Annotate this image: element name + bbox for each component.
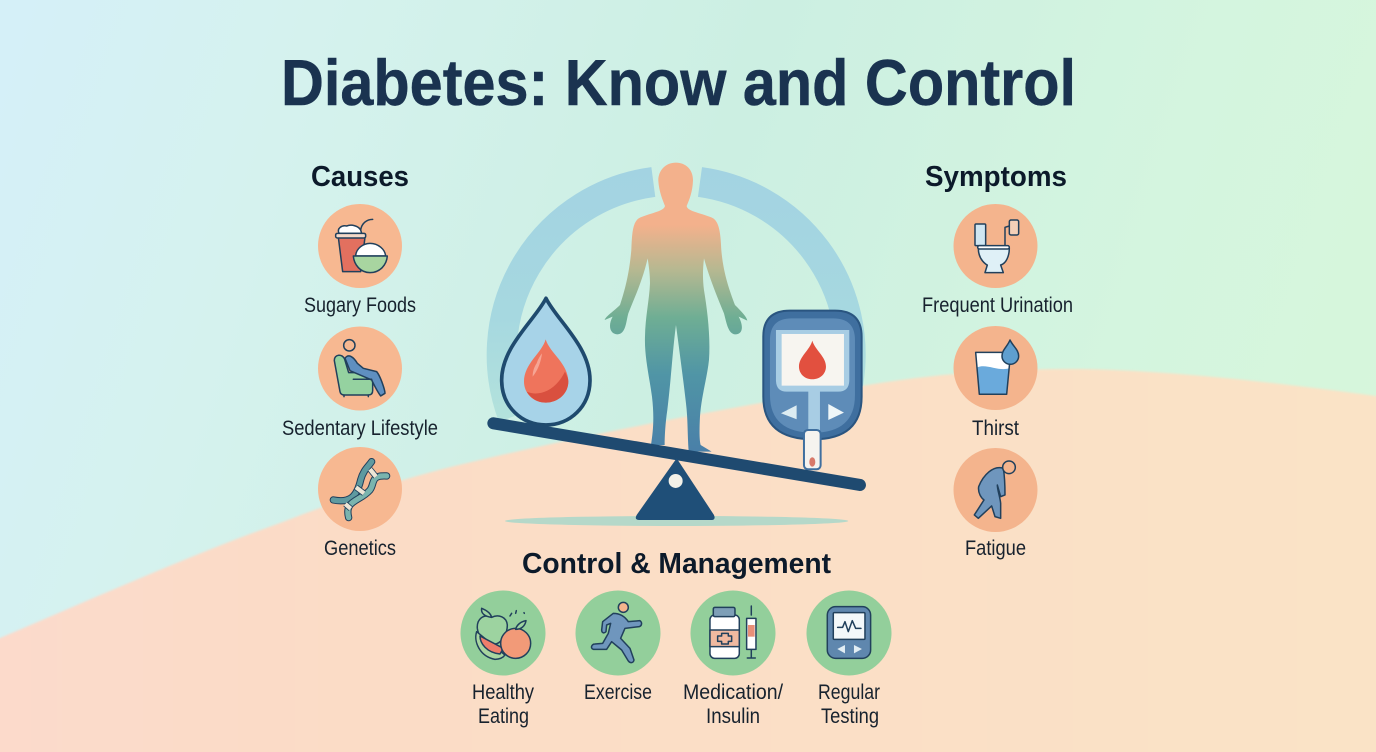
icon: medication and insulin [690,590,776,676]
label: genetics: Genetics [324,537,396,560]
icon: sugary foods [318,204,402,288]
seesaw fulcrum [636,458,715,520]
label: medication insulin: Insulin [706,705,760,728]
seesaw beam [493,423,860,485]
panel: central balance illustration [493,163,862,526]
icon: glass of water [954,326,1038,410]
label: medication insulin: Medication/ [683,681,783,704]
label: regular testing: Testing [821,705,879,728]
label: thirst: Thirst [972,417,1019,440]
label: frequent urination: Frequent Urination [922,294,1073,317]
heading: causes: Causes [311,161,409,193]
label: medication insulin [683,681,783,728]
panel: symptoms [922,161,1073,560]
ground shadow [505,516,848,526]
heading: symptoms: Symptoms [925,161,1067,193]
icon: tired person [954,448,1038,532]
label: exercise: Exercise [584,681,652,704]
icon: exercise runner [576,590,660,676]
label: healthy eating [472,681,534,728]
label: regular testing [818,681,880,728]
label: healthy eating: Eating [478,705,529,728]
label: sedentary lifestyle: Sedentary Lifestyle [282,417,438,440]
icon: regular testing meter [806,590,892,676]
icon: sedentary lifestyle [318,326,402,410]
icon: blood drop in blue teardrop [502,298,590,425]
panel: control and management [460,548,892,728]
icon: toilet [954,204,1038,288]
label: sugary foods: Sugary Foods [304,294,416,317]
icon: healthy eating [460,590,546,676]
heading: control and management: Control & Management [522,548,831,580]
blue arc right [700,182,851,383]
blue arc left [502,182,653,417]
icon: dna genetics [318,447,402,531]
human body silhouette [605,163,747,452]
label: regular testing: Regular [818,681,880,704]
label: fatigue: Fatigue [965,537,1026,560]
title: Diabetes: Know and Control [281,46,1076,119]
label: healthy eating: Healthy [472,681,534,704]
panel: causes [282,161,438,560]
icon: glucose meter [763,311,862,469]
